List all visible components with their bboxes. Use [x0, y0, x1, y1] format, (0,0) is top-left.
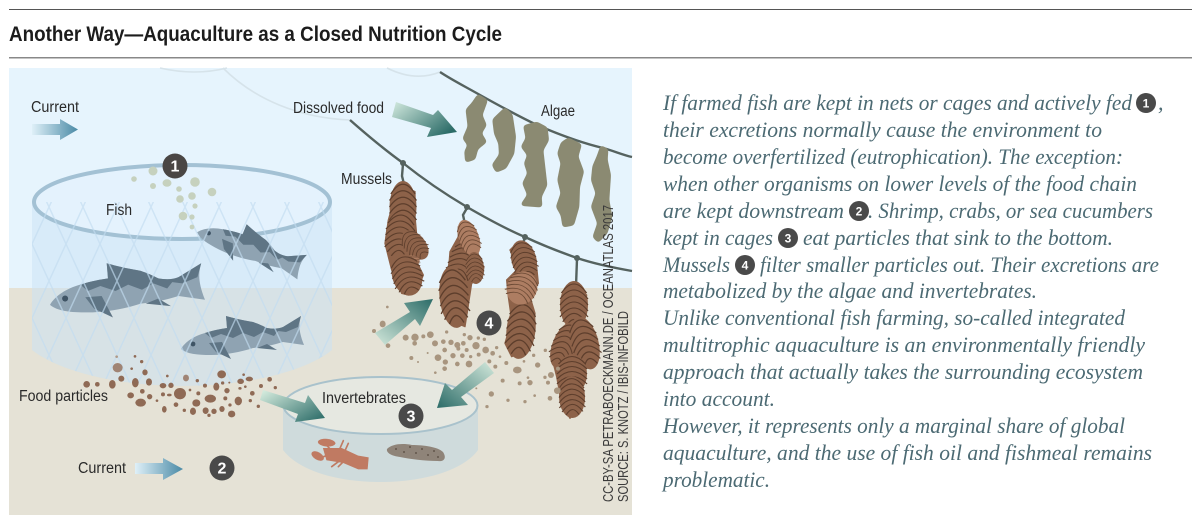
invertebrate tub — [283, 377, 478, 482]
mussels bunch 2 — [436, 217, 485, 329]
mussels bunch 3 — [501, 237, 543, 360]
number 2 — [210, 456, 234, 480]
excretion bubbles — [131, 166, 216, 229]
fish net cage — [32, 165, 332, 386]
pale surface lines — [160, 68, 440, 120]
text block: explanation: problematic. — [661, 467, 770, 492]
panel: illustration — [9, 68, 632, 515]
number 4 — [476, 310, 502, 336]
text block: explanation: aquaculture, and the use of fish oil and fishmeal remains — [663, 440, 1152, 465]
text block: explanation: . Shrimp, crabs, or sea cucumbers — [868, 198, 1153, 223]
text block: explanation: approach that actually takes the surrounding ecosystem — [663, 359, 1143, 384]
fish: top — [193, 206, 309, 291]
label: dissolved food: Dissolved food — [293, 100, 384, 117]
text block: explanation: filter smaller particles out. Their excretions are — [760, 252, 1159, 277]
number 4: 4 — [485, 316, 494, 332]
filtered particles — [372, 306, 561, 421]
text block: explanation: eat particles that sink to the bottom. — [803, 225, 1113, 250]
fish: lower — [181, 316, 304, 359]
mussel hangers — [400, 160, 580, 286]
water background — [9, 68, 632, 288]
mussels bunch 1 — [384, 181, 434, 299]
text block: explanation: become overfertilized (eutrophication). The exception: — [663, 144, 1123, 169]
text block: explanation: kept in cages — [663, 225, 773, 250]
text block: explanation: 3 — [785, 232, 792, 246]
text block: explanation: 2 — [856, 204, 863, 218]
text block: explanation — [661, 90, 1164, 492]
net ring — [34, 165, 330, 239]
icon: sea cucumber — [387, 444, 445, 461]
net back — [32, 165, 332, 239]
credit lines — [601, 205, 632, 502]
mussels bunch 4 — [544, 281, 605, 418]
text block: explanation: are kept downstream — [663, 198, 844, 223]
label: invertebrates: Invertebrates — [322, 390, 406, 407]
credit lines: SOURCE: S. KNOTZ / IBIS-INFOBILD — [616, 311, 632, 502]
arrow: dissolved food — [392, 102, 457, 137]
label: food particles: Food particles — [19, 388, 108, 405]
number 3 — [398, 404, 424, 428]
text block: explanation: Unlike conventional fish farming, so-called integrated — [663, 305, 1126, 330]
net body — [32, 202, 332, 386]
text block: explanation: However, it represents only a marginal share of global — [662, 413, 1125, 438]
credit lines: CC-BY-SA PETRABOECKMANN.DE / OCEANATLAS 2017 — [601, 205, 617, 502]
text block: explanation: 4 — [742, 258, 749, 272]
label: mussels: Mussels — [341, 171, 392, 188]
icon: lobster — [310, 438, 368, 469]
seabed background — [9, 288, 632, 515]
text block: explanation: , — [1158, 90, 1164, 115]
food particles — [83, 355, 277, 417]
label: algae: Algae — [541, 103, 575, 120]
text block: explanation: multitrophic aquaculture is an environmentally friendly — [663, 332, 1145, 357]
tub wall — [283, 405, 478, 482]
label: current top: Current — [31, 99, 80, 116]
number 1 — [162, 154, 188, 178]
number 3: 3 — [407, 408, 416, 426]
tub rim — [284, 377, 478, 434]
text block: explanation: Mussels — [662, 252, 730, 277]
ropes — [350, 72, 632, 271]
arrow: to invertebrates — [260, 390, 325, 422]
header rules — [9, 9, 1192, 58]
arrow: to tub — [437, 362, 494, 408]
text block: explanation: 1 — [1143, 96, 1150, 110]
arrow: current top — [32, 119, 78, 140]
number 1: 1 — [171, 158, 180, 176]
net mesh — [32, 202, 332, 386]
text block: explanation: their excretions normally cause the environment to — [663, 117, 1102, 142]
text block: explanation: If farmed fish are kept in nets or cages and actively fed — [662, 90, 1133, 115]
title: Another Way—Aquaculture as a Closed Nutrition Cycle — [9, 23, 502, 46]
arrow: to mussels — [375, 299, 433, 345]
algae — [464, 96, 611, 241]
arrow: current bottom — [135, 458, 183, 480]
label: fish: Fish — [106, 202, 132, 219]
label: current bottom: Current — [78, 460, 127, 477]
text block: explanation: into account. — [663, 386, 775, 411]
fish: large — [50, 263, 205, 317]
text block: explanation: metabolized by the algae and invertebrates. — [663, 278, 1037, 303]
number 2: 2 — [218, 460, 227, 478]
text block: explanation: when other organisms on lower levels of the food chain — [663, 171, 1137, 196]
